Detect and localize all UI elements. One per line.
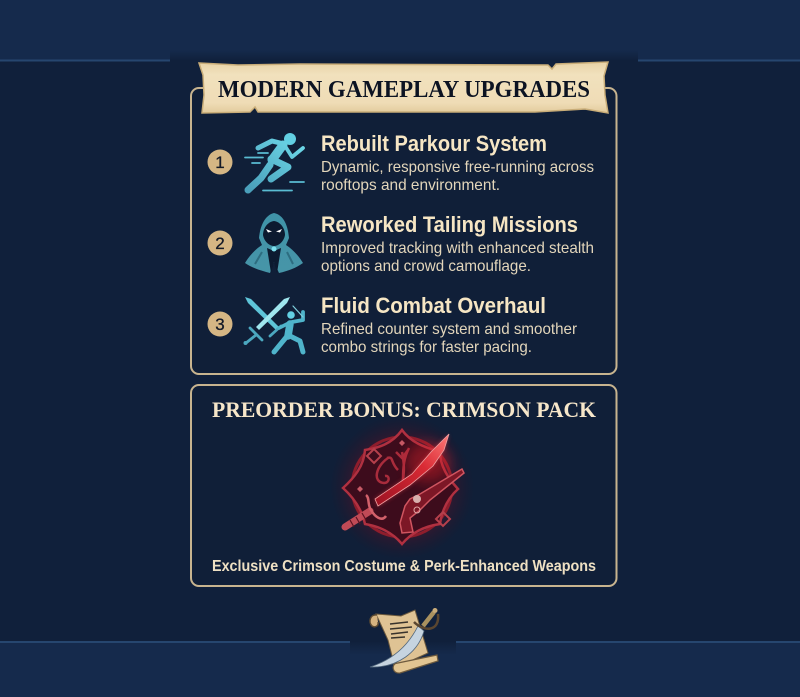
description: combat: combo strings for faster pacing. [321, 339, 532, 356]
description: combat [321, 321, 578, 356]
description: parkour: Dynamic, responsive free-running across [321, 159, 594, 176]
step 3 badge [208, 312, 232, 336]
title banner: MODERN GAMEPLAY UPGRADES [218, 77, 590, 103]
icon: hooded figure [245, 213, 303, 273]
description: combat: Refined counter system and smoother [321, 321, 578, 338]
description: tailing: options and crowd camouflage. [321, 258, 531, 275]
step 1 badge [208, 150, 232, 174]
heading: tailing: Reworked Tailing Missions [321, 212, 578, 237]
step 1 badge: 1 [215, 153, 225, 172]
title banner [199, 62, 608, 113]
step 2 badge: 2 [215, 234, 225, 253]
heading: parkour: Rebuilt Parkour System [321, 131, 547, 156]
caption: crimson pack: Exclusive Crimson Costume & Perk-Enhanced Weapons [212, 558, 596, 575]
heading: combat: Fluid Combat Overhaul [321, 293, 546, 318]
icon: runner [245, 133, 304, 190]
panel: preorder bonus [191, 385, 616, 586]
heading: preorder: PREORDER BONUS: CRIMSON PACK [212, 397, 596, 422]
step 2 badge [208, 230, 232, 256]
step 3 badge: 3 [215, 315, 225, 334]
description: tailing: Improved tracking with enhanced stealth [321, 240, 594, 257]
icon: crimson emblem [330, 415, 474, 559]
icon: scroll and sword [370, 608, 438, 673]
description: tailing [321, 240, 594, 275]
description: parkour [321, 159, 594, 194]
icon: crossed swords and fighter [244, 297, 303, 352]
description: parkour: rooftops and environment. [321, 177, 500, 194]
panel: gameplay upgrades [191, 88, 616, 374]
